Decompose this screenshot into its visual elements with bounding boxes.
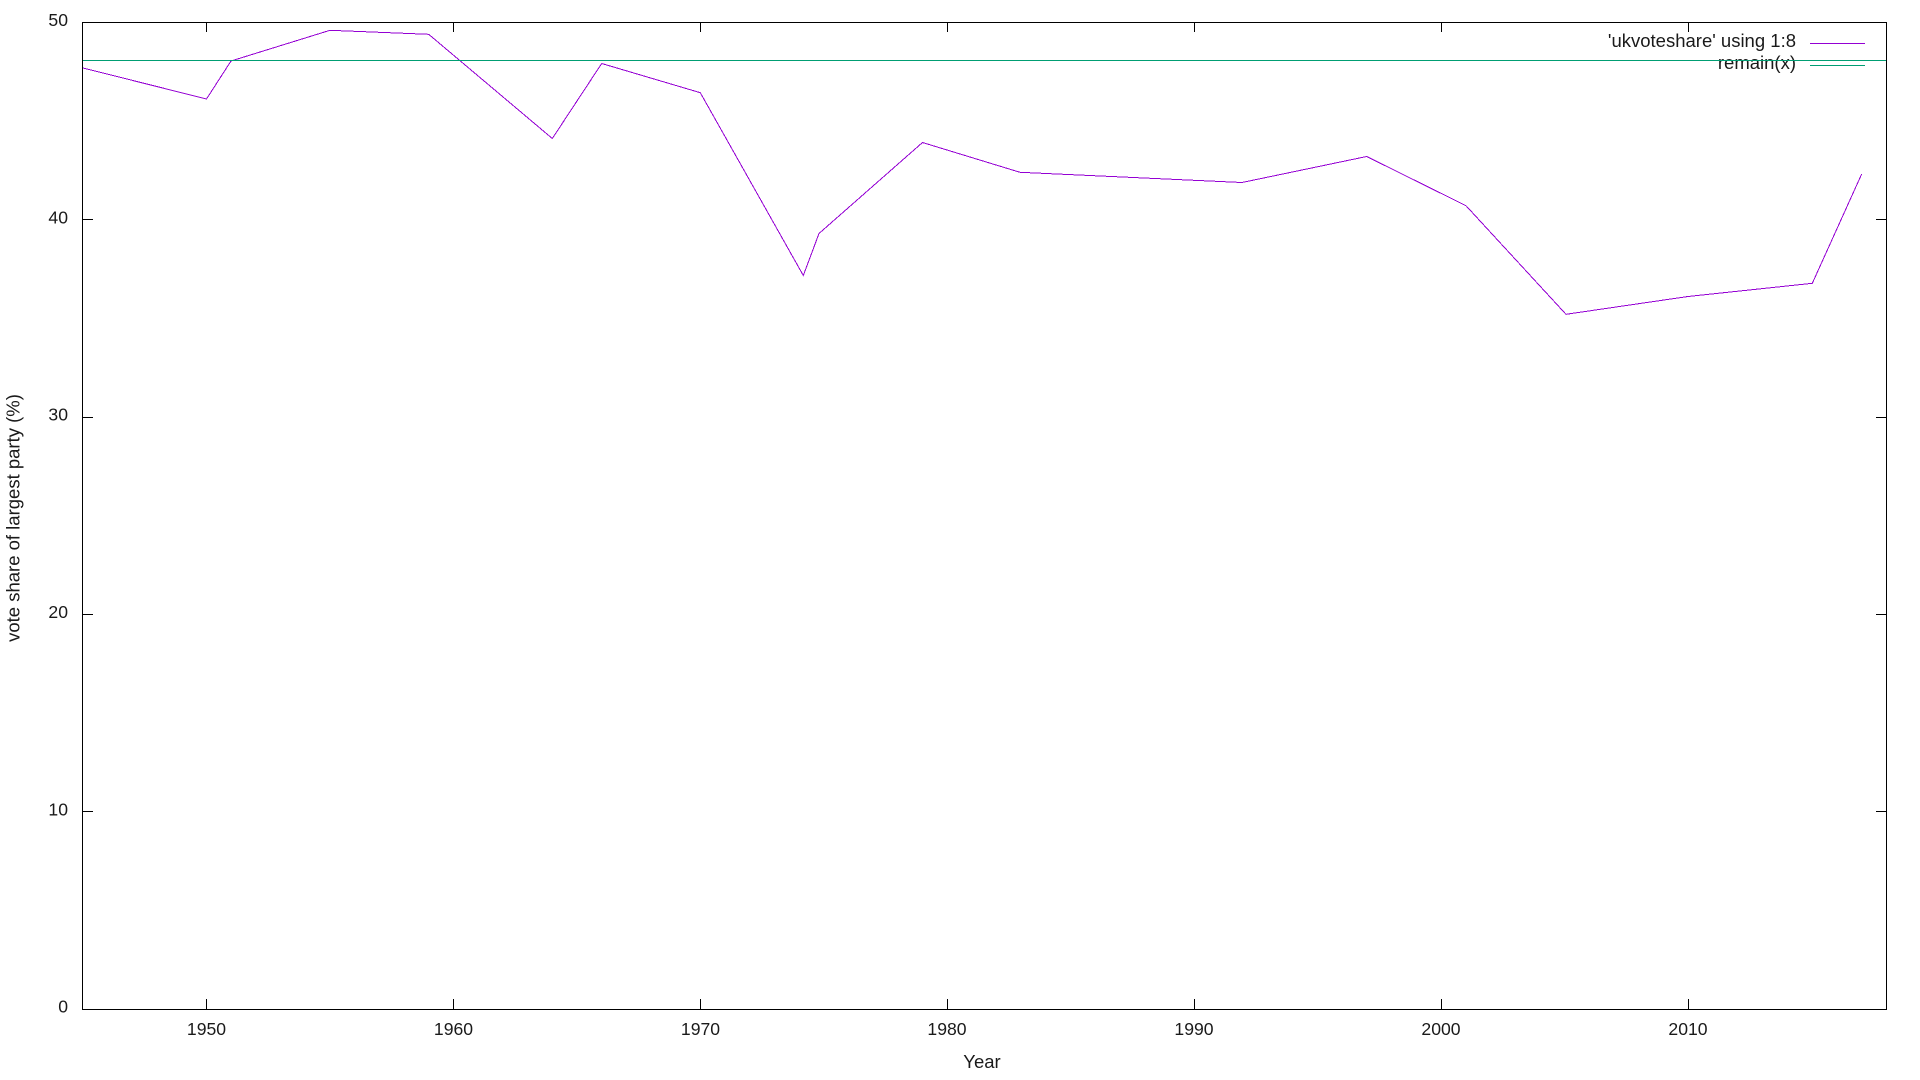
x axis tick labels: 2000 (1421, 1019, 1461, 1039)
x axis tick labels: 1960 (434, 1019, 473, 1039)
x axis tick labels: 2010 (1668, 1019, 1708, 1039)
data line: ukvoteshare (83, 30, 1862, 314)
x axis tick labels (187, 1019, 1708, 1039)
legend entry: remain(x): remain(x) (1718, 52, 1796, 73)
y axis tick labels: 0 (58, 996, 68, 1016)
x axis tick labels: 1990 (1174, 1019, 1214, 1039)
y axis tick labels: 40 (48, 207, 68, 227)
x axis tick labels: 1970 (681, 1019, 720, 1039)
legend (1608, 30, 1865, 73)
y axis tick labels: 30 (48, 405, 68, 425)
x axis tick labels: 1980 (927, 1019, 967, 1039)
legend entry: ukvoteshare: 'ukvoteshare' using 1:8 (1608, 30, 1796, 51)
constant line: remain(x) (83, 60, 1886, 62)
x axis title: Year (963, 1051, 1001, 1072)
y axis tick labels: 20 (48, 602, 68, 622)
x axis tick labels: 1950 (187, 1019, 226, 1039)
y axis tick labels: 50 (48, 10, 68, 30)
y axis tick labels (48, 10, 68, 1016)
y axis tick labels: 10 (48, 799, 68, 819)
y axis title: vote share of largest party (%) (2, 394, 24, 642)
